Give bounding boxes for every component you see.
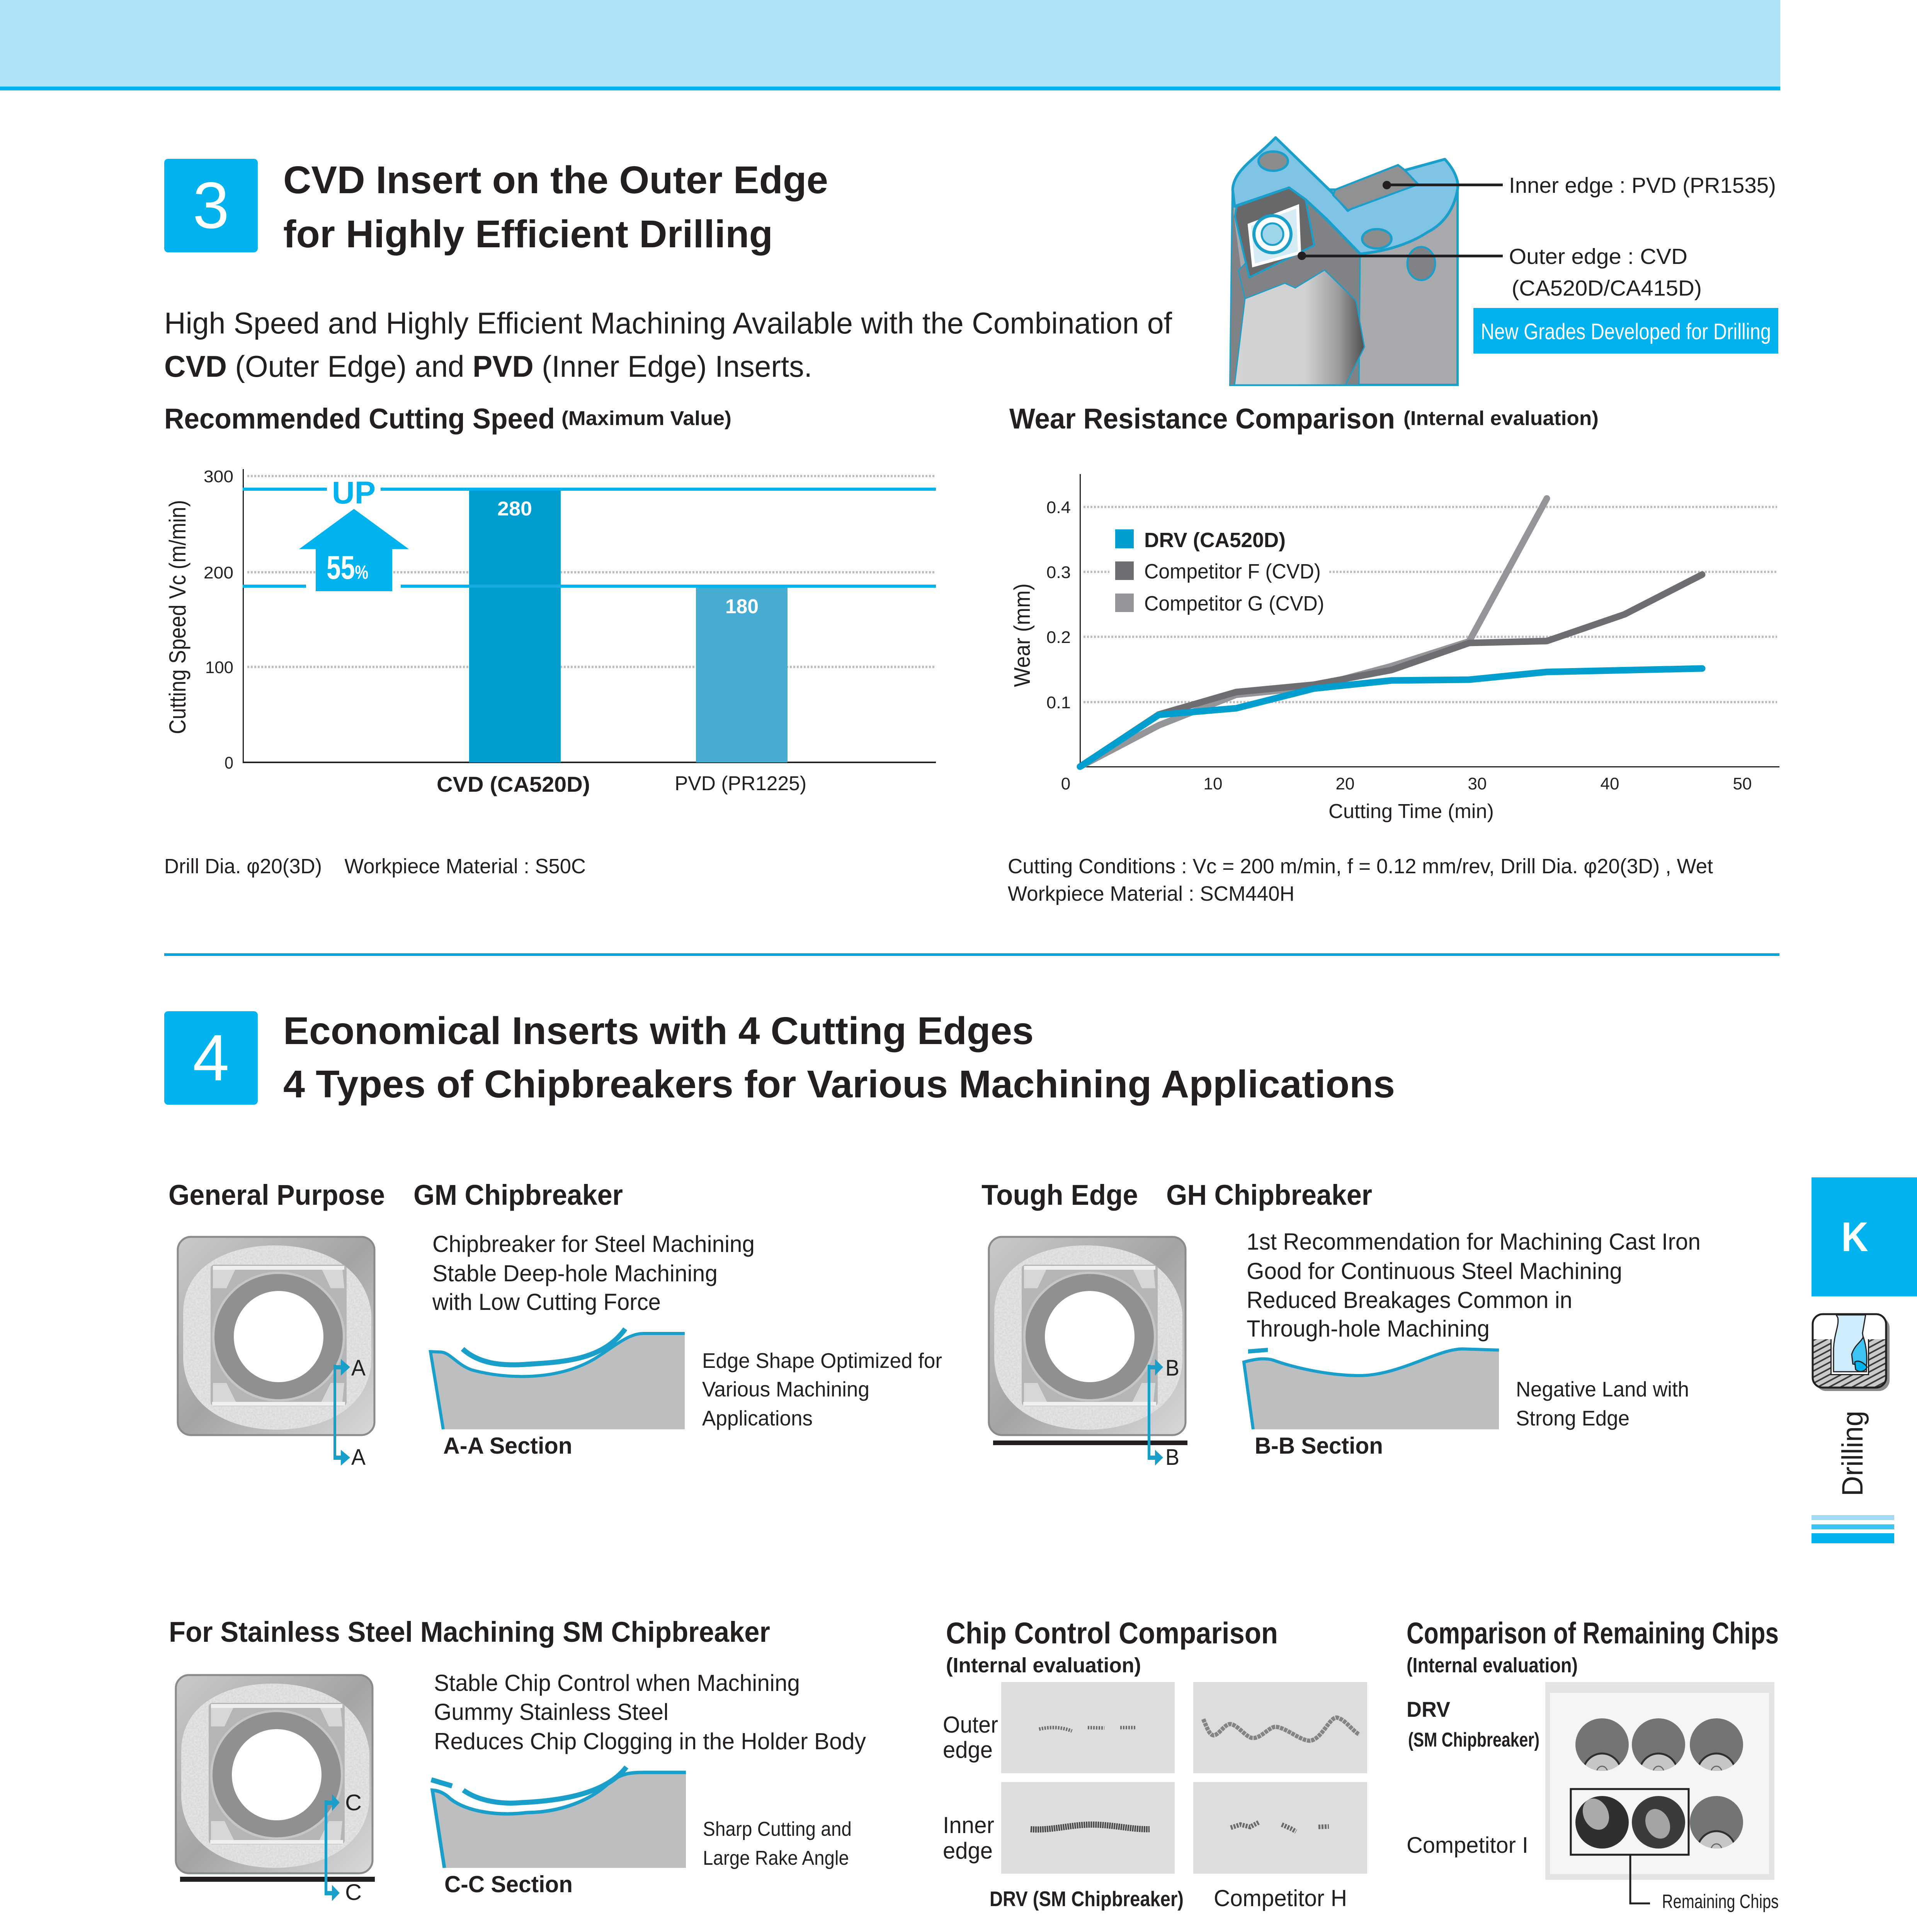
heading	[981, 1179, 1372, 1211]
description: Gummy Stainless Steel	[434, 1699, 668, 1725]
heading: For Stainless Steel Machining SM Chipbreaker	[169, 1616, 770, 1648]
section note	[1516, 1377, 1689, 1430]
tag: new grades	[1473, 308, 1778, 354]
section arrows C-C: C	[345, 1790, 362, 1815]
footnote: bar chart conditions: Drill Dia. φ20(3D) Workpiece Material : S50C	[164, 855, 586, 878]
y axis ticks: 200	[204, 563, 233, 582]
section arrows A-A	[333, 1355, 366, 1470]
column labels	[990, 1885, 1347, 1911]
section 4 heading: 4 Types of Chipbreakers for Various Machining Applications	[283, 1063, 1395, 1106]
section arrows B-B	[1148, 1355, 1179, 1470]
callout: outer edge: Outer edge : CVD	[1509, 244, 1687, 269]
bar labels: CVD (CA520D)	[437, 772, 590, 796]
section 3 heading	[283, 158, 828, 256]
heading: recommended cutting speed: (Maximum Value)	[561, 407, 731, 430]
bar labels	[437, 772, 806, 796]
section label: A-A Section	[443, 1433, 572, 1459]
section 4 number badge	[164, 1011, 258, 1105]
section 3 intro text	[164, 306, 1172, 383]
y axis ticks	[1046, 498, 1071, 712]
section arrows C-C	[325, 1790, 362, 1905]
section 4 number badge: 4	[193, 1021, 229, 1095]
bar labels: PVD (PR1225)	[675, 772, 806, 795]
tag: new grades: New Grades Developed for Drilling	[1481, 319, 1771, 344]
section note: Strong Edge	[1516, 1406, 1630, 1430]
section 4 heading	[283, 1009, 1395, 1106]
photo: GM insert	[178, 1237, 374, 1435]
section note: Edge Shape Optimized for	[702, 1349, 942, 1372]
header band	[0, 0, 1780, 90]
legend: Competitor F (CVD)	[1144, 560, 1321, 583]
description: Reduces Chip Clogging in the Holder Body	[434, 1728, 866, 1754]
section 3 number badge: 3	[193, 169, 229, 242]
section label: C-C Section	[444, 1871, 573, 1897]
section note: Sharp Cutting and	[703, 1818, 852, 1840]
photo: test plate	[1545, 1682, 1774, 1880]
x axis ticks: 10	[1204, 774, 1222, 793]
panel: comparison of remaining chips	[1407, 1616, 1779, 1932]
heading	[1407, 1616, 1779, 1677]
x axis ticks	[1061, 774, 1752, 793]
description: 1st Recommendation for Machining Cast Iron	[1247, 1229, 1701, 1255]
description: Chipbreaker for Steel Machining	[432, 1231, 755, 1257]
footnote: line chart conditions: Workpiece Material : SCM440H	[1008, 882, 1294, 905]
series: competitor G	[1080, 498, 1547, 767]
legend	[1115, 529, 1324, 615]
row labels: (SM Chipbreaker)	[1408, 1729, 1539, 1751]
section note: Large Rake Angle	[703, 1847, 849, 1869]
section note: Negative Land with	[1516, 1377, 1689, 1401]
photo: DRV inner chips	[1001, 1782, 1175, 1874]
photo: competitor H outer chips	[1193, 1682, 1367, 1773]
panel: chip control comparison SM	[943, 1616, 1367, 1932]
up arrow 55%	[299, 509, 409, 591]
section 4 heading: Economical Inserts with 4 Cutting Edges	[283, 1009, 1034, 1053]
heading: General Purpose	[168, 1179, 385, 1211]
bar: CVD 280	[469, 489, 561, 762]
row labels: Outer	[943, 1712, 998, 1738]
description	[1247, 1229, 1701, 1342]
section note	[702, 1349, 942, 1430]
row labels	[943, 1712, 998, 1864]
x axis ticks: 50	[1733, 774, 1752, 793]
section profile C-C	[431, 1767, 686, 1868]
callout: outer edge	[1298, 244, 1702, 301]
photo: GH insert	[989, 1237, 1186, 1435]
y axis title: Cutting Speed Vc (m/min)	[165, 500, 191, 734]
panel: GH chipbreaker	[981, 1179, 1701, 1470]
bar: CVD 280: 280	[497, 498, 532, 520]
footnote: line chart conditions: Cutting Conditions : Vc = 200 m/min, f = 0.12 mm/rev, Drill Dia. φ20(3D) , Wet	[1008, 855, 1713, 878]
column labels: DRV (SM Chipbreaker)	[990, 1887, 1184, 1911]
heading: Comparison of Remaining Chips	[1407, 1616, 1779, 1650]
callout: inner edge: Inner edge : PVD (PR1535)	[1509, 173, 1776, 198]
description: Good for Continuous Steel Machining	[1247, 1258, 1622, 1284]
x axis ticks: 40	[1601, 774, 1619, 793]
photo: competitor H inner chips	[1193, 1782, 1367, 1874]
description: Reduced Breakages Common in	[1247, 1287, 1572, 1313]
up arrow 55%: 55%	[327, 549, 368, 586]
y axis ticks: 0.3	[1046, 563, 1071, 582]
row labels: DRV	[1407, 1697, 1450, 1721]
heading: wear resistance comparison	[1009, 403, 1599, 435]
section label: B-B Section	[1255, 1433, 1383, 1459]
bar: PVD 180: 180	[725, 595, 759, 618]
series: competitor F	[1080, 575, 1702, 767]
y axis ticks: 0.4	[1046, 498, 1071, 517]
y axis title: Wear (mm)	[1010, 583, 1035, 687]
illustration: drill holder head with inserts	[1230, 138, 1458, 385]
section arrows B-B: B	[1165, 1445, 1179, 1470]
y axis ticks	[204, 467, 233, 772]
line chart: wear	[1010, 474, 1779, 823]
legend: Competitor G (CVD)	[1144, 592, 1324, 615]
heading: recommended cutting speed: Recommended Cutting Speed	[164, 403, 555, 435]
row labels: Competitor I	[1407, 1833, 1528, 1858]
y axis ticks: 0.1	[1046, 693, 1071, 712]
icon: drilling	[1813, 1314, 1890, 1391]
column labels: Competitor H	[1214, 1885, 1347, 1911]
heading	[168, 1179, 623, 1211]
heading: (Internal evaluation)	[1407, 1654, 1578, 1677]
panel: SM chipbreaker	[169, 1616, 866, 1905]
bar: PVD 180	[696, 586, 788, 762]
section 3 intro text: High Speed and Highly Efficient Machining Available with the Combination of	[164, 306, 1172, 340]
section arrows B-B: B	[1165, 1355, 1179, 1381]
heading: wear resistance comparison: (Internal evaluation)	[1403, 407, 1599, 430]
bar chart: cutting speed	[165, 467, 936, 796]
legend: DRV (CA520D)	[1144, 529, 1286, 552]
section 3 intro text: CVD (Outer Edge) and PVD (Inner Edge) Inserts.	[164, 349, 812, 383]
y axis ticks: 100	[205, 658, 233, 677]
description	[432, 1231, 755, 1315]
heading	[946, 1616, 1278, 1677]
section profile A-A	[430, 1329, 685, 1429]
series: DRV	[1080, 668, 1702, 767]
description: Through-hole Machining	[1247, 1316, 1490, 1342]
section arrows A-A: A	[351, 1445, 366, 1470]
photo: DRV outer chips	[1001, 1682, 1175, 1773]
callout: inner edge	[1383, 173, 1776, 198]
section note: Various Machining	[702, 1377, 869, 1401]
side stripes	[1812, 1515, 1894, 1543]
section profile B-B	[1244, 1348, 1499, 1429]
callout: remaining chips	[1630, 1855, 1779, 1912]
row labels: edge	[943, 1737, 993, 1763]
x axis ticks: 30	[1468, 774, 1487, 793]
callout: outer edge: (CA520D/CA415D)	[1512, 276, 1702, 301]
section 3 number badge	[164, 159, 258, 252]
heading: (Internal evaluation)	[946, 1654, 1141, 1677]
description: with Low Cutting Force	[432, 1289, 661, 1315]
row labels: Inner	[943, 1812, 994, 1838]
panel: GM chipbreaker	[168, 1179, 942, 1470]
photo: SM insert	[176, 1675, 373, 1873]
callout: remaining chips: Remaining Chips	[1662, 1891, 1779, 1912]
y axis ticks: 0.2	[1046, 628, 1071, 647]
heading: Tough Edge	[981, 1179, 1138, 1211]
section arrows A-A: A	[351, 1355, 366, 1381]
description: Stable Chip Control when Machining	[434, 1670, 800, 1696]
y axis ticks: 0	[225, 753, 233, 772]
y axis ticks: 300	[204, 467, 233, 486]
x axis ticks: 20	[1336, 774, 1354, 793]
row labels: edge	[943, 1838, 993, 1864]
heading: GM Chipbreaker	[413, 1179, 623, 1211]
description: Stable Deep-hole Machining	[432, 1260, 718, 1286]
side label: Drilling: Drilling	[1836, 1411, 1869, 1496]
UP label: UP	[332, 475, 376, 510]
section 3 heading: for Highly Efficient Drilling	[283, 213, 773, 256]
description	[434, 1670, 866, 1754]
side tab: K	[1812, 1177, 1917, 1296]
row labels	[1407, 1697, 1539, 1858]
heading: wear resistance comparison: Wear Resistance Comparison	[1009, 403, 1395, 435]
footnote: line chart conditions	[1008, 855, 1713, 905]
heading: Chip Control Comparison	[946, 1616, 1278, 1650]
heading: GH Chipbreaker	[1166, 1179, 1372, 1211]
section 3 heading: CVD Insert on the Outer Edge	[283, 158, 828, 202]
section arrows C-C: C	[345, 1880, 362, 1905]
x axis title: Cutting Time (min)	[1328, 800, 1494, 823]
side tab: K: K	[1841, 1213, 1868, 1260]
section note: Applications	[702, 1406, 813, 1430]
x axis ticks: 0	[1061, 774, 1070, 793]
section note	[703, 1818, 852, 1869]
